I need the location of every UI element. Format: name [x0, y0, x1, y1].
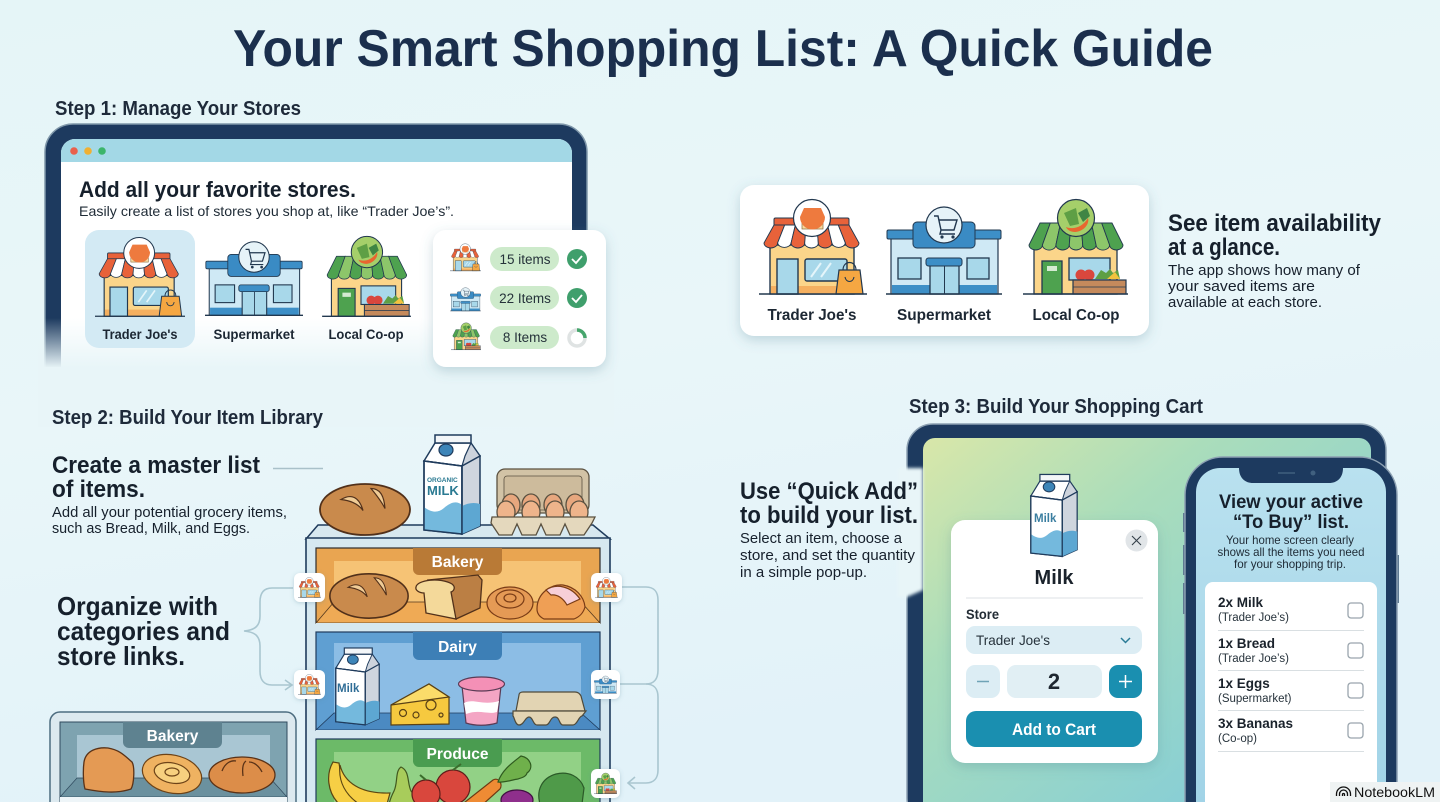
- heading: step 3: Step 3: Build Your Shopping Cart: [909, 396, 1203, 418]
- panel: lower bakery shelf detail: [50, 712, 296, 802]
- pill: 15 items: [490, 247, 559, 271]
- label: Supermarket: Supermarket: [214, 327, 295, 342]
- phone buttons: [1183, 513, 1399, 614]
- label: Trader Joe's: Trader Joe's: [102, 327, 178, 342]
- screen heading: Add all your favorite stores.: [79, 177, 356, 202]
- label: Bakery: [413, 548, 502, 575]
- icon: check 2: [567, 288, 587, 308]
- panel: pantry shelves: [50, 424, 1440, 802]
- pill: 15 items: 15 items: [499, 252, 551, 267]
- badge: left bakery: [294, 573, 325, 602]
- label: Bakery: Bakery: [432, 554, 484, 571]
- text block: quick add: Select an item, choose a: [740, 531, 903, 547]
- list item: milk: (Trader Joe’s): [1218, 612, 1289, 624]
- phone description: for your shopping trip.: [1234, 557, 1346, 571]
- icon: egg carton: [491, 469, 595, 535]
- screen description: Easily create a list of stores you shop at, like “Trader Joe’s”.: [79, 203, 454, 219]
- icon: bread: [320, 484, 410, 535]
- icon: milk carton: [336, 648, 379, 725]
- text block: quick add: in a simple pop-up.: [740, 565, 867, 581]
- badge: right produce: [591, 769, 620, 798]
- selected store tile: [85, 230, 195, 348]
- icon: mini store 2: [450, 288, 481, 311]
- label: Supermarket: Supermarket: [897, 307, 992, 324]
- phone heading: “To Buy” list.: [1233, 511, 1349, 533]
- arrow: right bracket to store badges: [620, 587, 658, 789]
- list item: bread: 1x Bread: [1218, 636, 1275, 651]
- text block: master list: of items.: [52, 476, 145, 503]
- quantity: [1007, 665, 1102, 698]
- badge: right bakery: [591, 573, 622, 602]
- icon: milk carton: Milk: [337, 683, 360, 695]
- phone screen: [1196, 468, 1386, 802]
- list item: eggs: (Supermarket): [1218, 693, 1292, 705]
- list item: bananas: [1218, 716, 1364, 752]
- icon: apples: [412, 764, 470, 802]
- list item: bananas: (Co-op): [1218, 733, 1257, 745]
- text block: master list: Create a master list: [52, 452, 260, 479]
- icon: mini store 1: [450, 244, 481, 271]
- icon: check 1: [567, 249, 587, 269]
- list item: eggs: 1x Eggs: [1218, 676, 1270, 691]
- phone description: [1218, 533, 1364, 571]
- icon: organic milk carton: ORGANIC: [427, 477, 458, 484]
- icon: organic milk carton: MILK: [427, 483, 459, 498]
- icon: Local Co-op store: [322, 236, 411, 316]
- list item: bread: [1218, 636, 1364, 670]
- shelf: bakery: [316, 548, 600, 623]
- phone description: shows all the items you need: [1218, 545, 1364, 559]
- list item: bananas: 3x Bananas: [1218, 716, 1293, 731]
- window title bar: [61, 139, 572, 162]
- label: Dairy: Dairy: [438, 639, 477, 656]
- icon: yogurt: [458, 677, 504, 725]
- text block: master list: such as Bread, Milk, and Eggs.: [52, 521, 250, 537]
- panel: item counts card: [433, 230, 606, 367]
- shelf top surface: [306, 525, 610, 539]
- text block: item availability: [1168, 210, 1382, 311]
- panel: laptop manage stores: [38, 124, 614, 427]
- phone description: Your home screen clearly: [1226, 533, 1354, 547]
- window controls: [70, 147, 106, 155]
- heading: step 1: Step 1: Manage Your Stores: [55, 98, 301, 120]
- text block: categories and store links: Organize with: [57, 591, 218, 621]
- group: items on top of shelf: [320, 435, 595, 535]
- icon: leafy greens: [539, 773, 584, 802]
- label: Trader Joe's: Trader Joe's: [768, 307, 857, 324]
- icon: milk carton: [1031, 474, 1077, 556]
- button: add to cart: [966, 711, 1142, 747]
- pill: 8 items: 8 Items: [503, 330, 547, 345]
- laptop frame: [45, 124, 587, 424]
- list item: bread: (Trader Joe’s): [1218, 653, 1289, 665]
- text block: item availability: your saved items are: [1168, 279, 1315, 295]
- shelf: dairy: [316, 632, 600, 730]
- icon: Supermarket store: [205, 242, 303, 315]
- quantity: 2: [1048, 669, 1060, 694]
- pill: 22 items: [490, 286, 559, 310]
- list item: milk: 2x Milk: [1218, 595, 1264, 610]
- badge: left dairy: [294, 670, 325, 699]
- popup card: [951, 474, 1158, 763]
- icon: round bread: [209, 757, 275, 793]
- icon: organic milk carton: [424, 435, 480, 534]
- text block: item availability: The app shows how many of: [1168, 263, 1361, 279]
- icon: loaf: [83, 748, 134, 792]
- phone heading: [1219, 491, 1363, 533]
- icon: cinnamon roll: [487, 587, 533, 619]
- icon: bread loaf: [416, 575, 482, 619]
- label: Dairy: [413, 632, 502, 660]
- panel: store availability card: [740, 185, 1149, 336]
- panel: phone to buy list: [1183, 457, 1399, 802]
- icon: pear: [389, 767, 417, 802]
- text block: quick add: to build your list.: [740, 502, 918, 529]
- watermark: NotebookLM: [1330, 782, 1440, 802]
- list item: milk: [1218, 595, 1364, 630]
- icon: milk carton: Milk: [1034, 513, 1057, 525]
- tablet screen: [923, 438, 1371, 802]
- text block: categories and store links: categories and: [57, 616, 230, 646]
- button: plus: [1109, 665, 1142, 698]
- text block: quick add: Use “Quick Add”: [740, 478, 918, 505]
- pill: 8 items: [490, 326, 559, 349]
- icon: progress ring: [569, 330, 585, 346]
- icon: Trader Joe's store: [759, 200, 867, 294]
- list card: [1205, 582, 1377, 802]
- icon: cheese: [391, 684, 449, 725]
- link badges: [294, 573, 622, 798]
- label: store: Store: [966, 607, 999, 622]
- icon: carrot: [460, 756, 531, 802]
- text block: master list: Add all your potential grocery items,: [52, 505, 287, 521]
- watermark: NotebookLM: NotebookLM: [1354, 784, 1435, 800]
- dropdown: store: [966, 626, 1142, 654]
- icon: Trader Joe's store: [95, 238, 185, 316]
- icon: Local Co-op store: [1023, 200, 1128, 294]
- badge: right dairy: [591, 670, 620, 699]
- icon: beet: [501, 790, 533, 802]
- text block: item availability: at a glance.: [1168, 234, 1280, 261]
- arrow: left bracket to store badges: [244, 588, 293, 690]
- text block: quick add: [740, 478, 918, 581]
- text block: quick add: store, and set the quantity: [740, 548, 916, 564]
- item name: Milk: [1035, 567, 1074, 589]
- text block: categories and store links: [57, 591, 230, 671]
- shelf: produce: [316, 739, 600, 802]
- phone notch: [1239, 468, 1343, 483]
- text block: item availability: See item availability: [1168, 210, 1382, 237]
- text block: categories and store links: store links.: [57, 641, 185, 671]
- pill: 22 items: 22 Items: [499, 291, 551, 306]
- tablet frame: [907, 424, 1386, 802]
- icon: spiral roll: [139, 749, 205, 799]
- shelf frame: [306, 538, 610, 802]
- heading: step 2: Step 2: Build Your Item Library: [52, 407, 324, 429]
- icon: iced pastry: [537, 585, 585, 619]
- icon: closed egg box: [513, 692, 586, 725]
- label: Bakery: Bakery: [147, 728, 199, 745]
- label: Local Co-op: Local Co-op: [328, 327, 404, 342]
- label: Bakery: [123, 722, 222, 748]
- panel: tablet quick add: [898, 424, 1386, 802]
- list item: eggs: [1218, 676, 1364, 710]
- label: Local Co-op: Local Co-op: [1032, 307, 1120, 324]
- button: add to cart: Add to Cart: [1012, 721, 1096, 739]
- phone frame: [1185, 457, 1397, 802]
- dropdown: store: Trader Joe's: [976, 632, 1050, 648]
- text block: item availability: available at each store.: [1168, 295, 1322, 311]
- button: minus: [966, 665, 1000, 698]
- label: Produce: [413, 739, 502, 767]
- phone heading: View your active: [1219, 491, 1363, 513]
- icon: bananas: [329, 762, 390, 802]
- icon: round bread: [330, 574, 408, 618]
- button: close: [1126, 530, 1148, 552]
- title: Your Smart Shopping List: A Quick Guide: [233, 20, 1213, 78]
- icon: Supermarket store: [886, 207, 1002, 294]
- laptop screen: [61, 139, 572, 420]
- icon: mini store 3: [451, 323, 481, 350]
- text block: master list: [52, 452, 287, 537]
- label: Produce: Produce: [426, 746, 489, 763]
